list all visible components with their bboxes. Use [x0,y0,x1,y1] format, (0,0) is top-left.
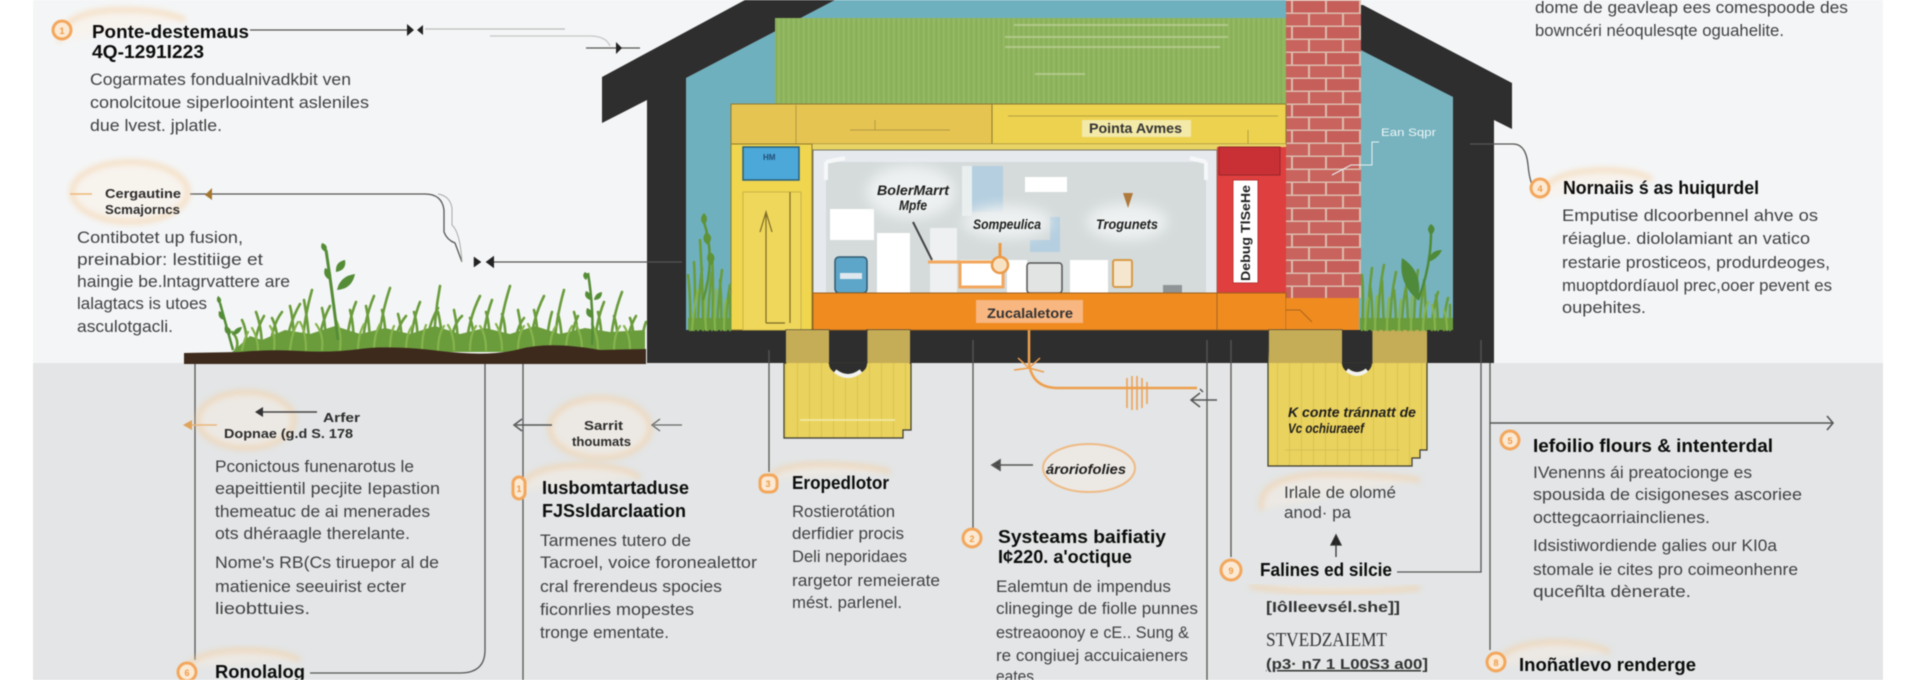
callout 9 body: Ealemtun de impendus [996,578,1171,596]
callout 2 body [77,229,290,336]
callout 10 details [1266,599,1428,673]
callout 2: left [70,162,290,336]
cavity label: Ean Sqpr [1381,127,1436,139]
callout 11 badge: 5 [1507,436,1513,446]
callout 1 heading [92,22,249,62]
inner plant right [1401,224,1442,300]
callout 7 glow [550,398,650,458]
callout 10 note: Irlale de olomé [1284,484,1396,502]
callout 12: bottom right heading [1487,642,1696,675]
callout 11 body: octtegcaorriainclienes. [1533,509,1710,527]
callout 10 badge [1221,560,1241,580]
callout 2 tick [70,193,92,195]
callout 2 glow [72,162,188,222]
callout 9 heading [998,527,1166,567]
callout 2 label: Cergautine [105,186,181,201]
callout 5 body: Pconictous funenarotus le [215,458,414,476]
callout 10: below right footing [1221,474,1428,673]
chimney [1286,0,1361,298]
callout 7 glow arc [519,465,640,492]
callout 6: bottom left heading: 6 [184,668,190,678]
callout 11 body: stomale ie cites pro coimeonhenre [1533,561,1798,579]
callout 10 badge: 9 [1228,566,1234,576]
callout 7 body: cral frerendeus spocies [540,578,722,596]
right footing label: K conte tránnatt de [1288,405,1417,420]
callout 2 body: asculotgacli. [77,318,173,336]
callout 5 glow [198,392,294,448]
callout 9 body [996,578,1198,680]
callout 8: centre [760,464,940,612]
beam inner detail [796,105,1278,146]
callout 1: top left [53,10,369,135]
callout 5: lower left [183,392,440,618]
callout 7 body: Tarmenes tutero de [540,532,691,550]
callout 9 arrow [992,460,1033,470]
callout 4: right [1531,170,1832,317]
callout 7: middle left [513,398,758,642]
callout 1 body [90,71,369,135]
right footing label [1288,405,1417,436]
orange floor: Zucalaletore [987,305,1073,321]
callout 1 glow [60,10,185,42]
beam label: Pointa Avmes [1089,120,1182,136]
orange tank [1113,260,1132,287]
callout 10 glow top [1261,474,1420,510]
callout 4 badge [1531,179,1549,197]
callout 10 details: (p3· n7 1 L00S3 a00] [1266,656,1428,673]
room interior [813,150,1217,293]
callout 8 body: derfidier procis [792,525,904,543]
left yellow column [731,144,812,330]
callout 5 body [215,458,440,618]
callout 10 note [1284,484,1396,522]
blue panel [743,147,799,180]
callout 4 badge: 4 [1537,184,1543,194]
left roof and wall [602,0,835,363]
callout 1 heading: Ponte-destemaus [92,22,249,42]
attic beam left [731,104,992,144]
callout 9 heading: I¢220. a'octique [998,547,1132,567]
callout 5 body: themeatuc de ai menerades [215,503,430,521]
callout 2 body: lalagtacs is utoes [77,295,207,313]
callout 4 body: réiaglue. diololamiant an vatico [1562,230,1810,248]
tall plant [321,243,355,340]
callout 9 heading: Systeams baifiatiy [998,527,1166,547]
right footing label: Vc ochiuraeef [1288,421,1365,436]
callout 4 heading: Nornaiis ś as huiqurdel [1563,178,1759,198]
callout 4 body: oupehites. [1562,299,1646,317]
callout 7 body: Tacroel, voice foronealettor [540,554,758,572]
blue appliance [835,257,867,293]
callout 11 body: quceñlta dènerate. [1533,583,1691,601]
callout 10 note: anod· pa [1284,504,1352,522]
callout 1 heading: 4Q-1291I223 [92,42,204,62]
red column [1217,147,1286,293]
callout 7 body: tronge ementate. [540,624,669,642]
callout 10 glow bottom [1250,586,1420,593]
conduit arrow [1191,389,1217,407]
right grass plant [583,272,602,345]
callout 5 body: eapeittientil pecjite Iepastion [215,480,440,498]
callout 8 glow [768,464,890,480]
callout 8 body: Rostierotátion [792,503,895,521]
right footing [1268,330,1427,466]
callout 9 badge: 2 [969,534,975,544]
door with arrow [743,192,801,330]
cavity label [1332,127,1436,175]
callout 11: lower right [1501,431,1802,601]
callout 9 body: estreaoonoy e cE.. Sung & [996,624,1189,642]
small cone [1123,193,1133,208]
callout 2 label [105,186,181,217]
small plant [217,296,242,350]
teal interior wall space [686,0,1290,330]
callout 11 body: Idsistiwordiende galies our KI0a [1533,537,1778,555]
callout 1 body: due lvest. jplatle. [90,117,222,135]
callout 2 body: haingie be.lntagrvattere are [77,273,290,291]
inner grass right [1360,224,1453,330]
callout 9 body: clineginge de fiolle punnes [996,600,1198,618]
callout 11 body: spousida de cisigoneses ascoriee [1533,486,1802,504]
callout 1 body: conolcitoue siperloointent asleniles [90,94,369,112]
small grey box [1163,285,1182,293]
grey appliance [1027,263,1062,293]
callout 12: bottom right heading: Inoñatlevo renderge [1519,655,1696,675]
callout 5 label: Arfer [323,410,360,425]
callout 9 label: ároriofolies [1046,462,1127,477]
callout 3: top right text [1535,0,1848,40]
callout 7 label [572,418,631,449]
inner grass left [688,213,731,330]
callout 6: bottom left heading [178,650,305,680]
callout 7 label: Sarrit [584,418,624,433]
callout 5 label: Dopnae (g.d S. 178 [224,426,353,441]
callout 7 heading [542,478,689,521]
exterior grass and soil [184,243,646,364]
callout 3: top right text: bowncéri néoqulesqte oguahelite. [1535,22,1784,40]
callout 4 body: muoptdordíauol prec,ooer pevent es [1562,277,1832,295]
callout 7 label: thoumats [572,434,631,449]
callout 4 body [1562,207,1832,317]
callout 7 badge: 1 [516,484,522,494]
callout 11 body: IVenenns ái preatocionge es [1533,464,1752,482]
callout 2 label: Scmajorncs [105,202,180,217]
room label: boiler: Mpfe [899,198,927,213]
callout 4 glow [1540,170,1652,198]
callout 1 body: Cogarmates fondualnivadkbit ven [90,71,351,89]
attic beam right [992,104,1286,144]
background: ground area [33,363,1883,680]
callout 1 badge: 1 [59,26,65,36]
callout 11 badge [1501,431,1519,449]
right roof and wall [1351,5,1512,363]
callout 5 body: Nome's RB(Cs tiruepor al de [215,554,439,572]
callout 8 body [792,503,940,612]
callout 11 body [1533,464,1802,601]
callout 10 details: [Iôlleevsél.she]] [1266,599,1400,616]
callout 9 lozenge [1043,444,1135,492]
left footing [784,330,911,438]
pipework [913,222,1008,287]
green roof [775,18,1286,104]
callout 1 badge [53,21,71,39]
red column: Debug TlSeHe [1238,185,1253,281]
callout 2 body: preinabior: lestitiige et [77,251,263,269]
room label: boiler [877,183,950,213]
callout 7 heading: FJSsldarclaation [542,501,686,521]
background: upper sky area [33,0,1883,363]
callout 10 details: STVEDZAIEMT [1266,629,1387,651]
callout 9: centre right [963,444,1198,680]
callout 8 body: mést. parlenel. [792,594,902,612]
room label: boiler: BolerMarrt [877,183,950,198]
callout 5 body: lieobttuies. [215,600,310,618]
soil strip [184,345,646,364]
room label: trap: Trogunets [1096,217,1158,232]
callout 5 arrows [183,407,317,430]
callout 7 arrows [514,419,682,431]
base slab [647,330,1494,363]
callout 11 heading: Iefoilio flours & intenterdal [1533,436,1773,456]
callout 4 body: restarie prosticeos, produrdeoges, [1562,254,1830,272]
callout 5 body: ots dhéraagle therelante. [215,525,410,543]
callout 8 body: rargetor remeierate [792,572,940,590]
house cross-section [602,0,1512,466]
room label: sump: Sompeulica [973,217,1041,232]
teal right cavity [1355,43,1453,330]
orange floor [813,293,1359,330]
callout 5 body: matienice seeuirist ecter [215,578,407,596]
yellow strip above room [812,144,1286,150]
callout 8 badge: 3 [765,479,771,489]
inner plant left [701,213,714,300]
callout 2 body: Contibotet up fusion, [77,229,243,247]
orange conduit [1014,330,1197,410]
callout 5 label [224,410,360,441]
callout 4 body: Emputise dlcoorbennel ahve os [1562,207,1818,225]
callout 12: bottom right heading: 8 [1493,658,1499,668]
callout 9 badge [963,529,981,547]
callout 7 body [540,532,758,642]
blue panel: HM [763,153,776,162]
callout 7 heading: Iusbomtartaduse [542,478,689,498]
callout 10 heading: Falines ed silcie [1260,560,1392,580]
callout 8 heading: Eropedlotor [792,473,889,493]
callout 9 body: re congiuej accuicaieners [996,647,1188,665]
callout 8 body: Deli neporidaes [792,548,907,566]
callout 10 arrow up [1331,535,1341,557]
callout 8 badge [760,475,777,492]
callout 7 badge [513,477,525,499]
callout 7 body: ficonrlies mopestes [540,601,694,619]
